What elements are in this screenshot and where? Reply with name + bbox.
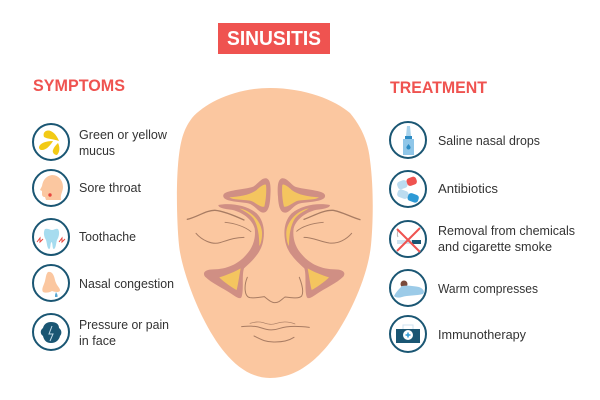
- treatment: saline nasal drops: Saline nasal drops: [438, 134, 540, 148]
- treatment: immunotherapy: [390, 316, 527, 352]
- icon: compress on head: [390, 270, 426, 306]
- mouth: [242, 322, 309, 342]
- icon: capsules: [390, 171, 426, 207]
- title: [218, 23, 330, 54]
- nose: [245, 277, 303, 303]
- heading: treatment: TREATMENT: [390, 78, 488, 97]
- icon: medical case: [390, 316, 426, 352]
- face illustration: [177, 88, 373, 378]
- icon: head with sore throat: [33, 170, 69, 206]
- symptom: green or yellow mucus: [33, 124, 168, 160]
- left maxillary sinus: [204, 204, 264, 298]
- treatment: warm compresses: [390, 270, 538, 306]
- symptom: nasal congestion: [33, 265, 174, 301]
- heading: symptoms: SYMPTOMS: [33, 76, 125, 95]
- treatment: saline nasal drops: [390, 122, 540, 158]
- icon: mucus drops: [33, 124, 69, 160]
- icon: crossed cigarette: [390, 221, 426, 257]
- icon: head with lightning: [33, 314, 69, 350]
- right maxillary sinus: [284, 204, 344, 298]
- icon: dropper bottle: [390, 122, 426, 158]
- face shape: [177, 88, 373, 378]
- symptom: toothache: Toothache: [79, 230, 136, 244]
- icon: tooth: [33, 219, 69, 255]
- symptom: toothache: [33, 219, 136, 255]
- treatment: antibiotics: Antibiotics: [438, 182, 498, 196]
- symptom: sore throat: [33, 170, 142, 206]
- symptom: green or yellow mucus: Green or yellow: [79, 128, 168, 142]
- title: SINUSITIS: [227, 28, 321, 50]
- symptom: pressure or pain in face: Pressure or pain: [79, 318, 169, 332]
- right frontal sinus: [278, 178, 325, 213]
- right eye and brow: [297, 210, 360, 243]
- treatment: antibiotics: [390, 171, 498, 207]
- left frontal sinus: [223, 178, 271, 213]
- symptom: nasal congestion: Nasal congestion: [79, 277, 174, 291]
- treatment: removal from chemicals and smoke: [390, 221, 575, 257]
- left eye and brow: [187, 210, 251, 243]
- treatment: warm compresses: Warm compresses: [438, 282, 538, 296]
- symptom: sore throat: Sore throat: [79, 181, 142, 195]
- symptom: green or yellow mucus: mucus: [79, 144, 115, 158]
- symptom: pressure or pain in face: [33, 314, 169, 350]
- treatment: removal from chemicals and smoke: and cigarette smoke: [438, 240, 552, 254]
- symptom: pressure or pain in face: in face: [79, 334, 116, 348]
- icon: nose: [33, 265, 69, 301]
- treatment: immunotherapy: Immunotherapy: [438, 328, 527, 342]
- treatment: removal from chemicals and smoke: Removal from chemicals: [438, 224, 575, 238]
